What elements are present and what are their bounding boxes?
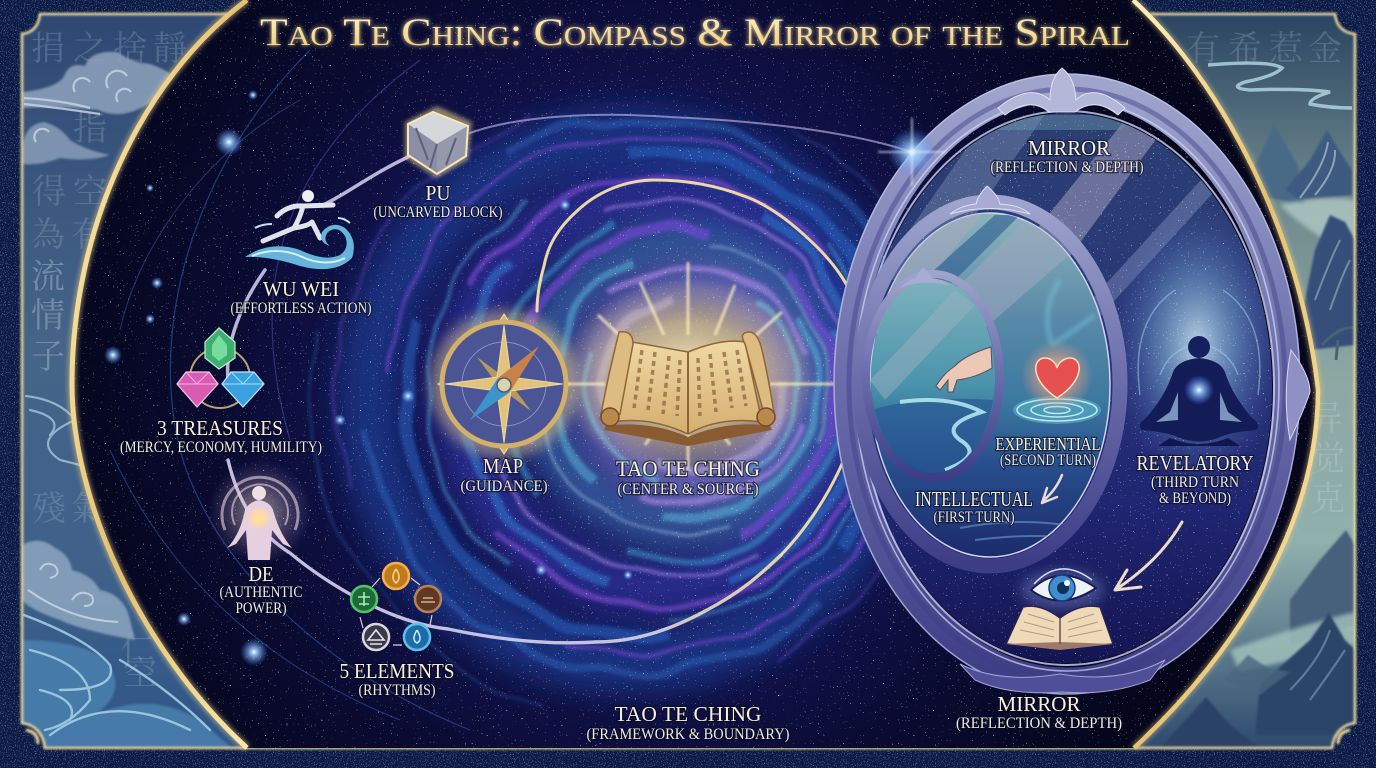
label: 3 Treasures: 3 TREASURES (157, 416, 283, 440)
label: De: (AUTHENTIC (220, 584, 302, 601)
left panel calligraphy: 流 (31, 258, 65, 296)
icon: wu wei runner on a wave (245, 190, 354, 269)
swirling water (22, 396, 232, 748)
right panel calligraphy (1186, 30, 1345, 518)
label: Tao Te Ching center: (CENTER & SOURCE) (618, 481, 758, 498)
left panel calligraphy: 仁 (121, 630, 155, 668)
label: Experiential: (SECOND TURN) (1000, 452, 1096, 469)
outer mirror side ornament (1286, 350, 1310, 440)
label: Revelatory: REVELATORY (1136, 451, 1254, 475)
lower cloud (22, 541, 135, 640)
large star flare on mirror frame (878, 118, 946, 186)
label: Tao Te Ching center: TAO TE CHING (616, 456, 760, 481)
icon: reaching hand (936, 347, 992, 392)
label: Tao Te Ching center (616, 456, 760, 498)
middle mirror interior (860, 205, 1101, 540)
label: Experiential (996, 434, 1100, 469)
label: Mirror top: MIRROR (1028, 136, 1110, 160)
label: Revelatory: & BEYOND) (1159, 490, 1231, 507)
right panel calligraphy: 克 (1311, 480, 1345, 518)
left panel calligraphy: 子 (31, 339, 65, 376)
right panel calligraphy: 有 (1186, 30, 1220, 68)
label: 5 Elements (340, 659, 454, 699)
label: Wu Wei: (EFFORTLESS ACTION) (230, 300, 372, 317)
left panel calligraphy: 空 (73, 173, 107, 211)
outer mirror interior reflections (885, 113, 1272, 662)
left panel calligraphy: 氣 (71, 490, 105, 528)
right panel calligraphy: 惹 (1269, 30, 1304, 68)
label: Intellectual (915, 487, 1033, 526)
right panel calligraphy: 异 (1309, 401, 1343, 438)
right panel calligraphy: 希 (1228, 30, 1262, 68)
icon: eye of insight (1020, 569, 1104, 610)
left panel calligraphy: 捨 (113, 30, 147, 68)
left panel calligraphy: 捐 (31, 30, 65, 68)
arrow: second turn to first (1042, 475, 1062, 503)
label: Experiential: EXPERIENTIAL (996, 434, 1100, 454)
outer mirror crest (998, 68, 1125, 115)
label: De: POWER) (236, 600, 286, 617)
left panel calligraphy: 空 (123, 655, 157, 693)
panel: middle mirror (860, 186, 1120, 566)
label: Mirror top (990, 136, 1144, 176)
label: Tao Te Ching framework: (FRAMEWORK & BOUNDARY) (586, 726, 790, 743)
left panel calligraphy: 得 (32, 174, 66, 211)
mountains (1160, 125, 1355, 748)
panel: right scroll with mountains (1130, 14, 1356, 748)
label: Mirror bottom: (REFLECTION & DEPTH) (956, 715, 1122, 732)
label: De: DE (248, 562, 274, 586)
label: Mirror bottom: MIRROR (998, 692, 1080, 716)
label: Revelatory: (THIRD TURN (1151, 474, 1239, 491)
label: Map: MAP (483, 454, 523, 478)
icon: De glowing figure (208, 460, 312, 564)
icon: five elements cycle (351, 563, 441, 650)
left panel calligraphy: 有 (71, 216, 105, 254)
bright stars (104, 90, 633, 666)
label: Mirror top: (REFLECTION & DEPTH) (990, 159, 1144, 176)
tree (1322, 328, 1355, 360)
label: Wu Wei: WU WEI (263, 277, 339, 301)
upper clouds (22, 52, 190, 164)
label: Mirror bottom (956, 692, 1122, 732)
label: Intellectual: (FIRST TURN) (934, 509, 1014, 526)
label: Pu: PU (426, 181, 450, 205)
label: Map (460, 454, 548, 495)
faint orbit lines (110, 50, 470, 730)
panel: small mirror (866, 268, 1000, 480)
panel: left scroll with clouds and water (22, 14, 262, 748)
label: Intellectual: INTELLECTUAL (915, 487, 1033, 511)
icon: compass (430, 310, 578, 458)
label: Tao Te Ching framework: TAO TE CHING (614, 702, 762, 726)
label: De (220, 562, 302, 617)
label: Tao Te Ching framework (586, 702, 790, 743)
label: Revelatory (1136, 451, 1254, 507)
left panel calligraphy: 指 (73, 110, 107, 148)
galaxy streaks (306, 114, 901, 708)
icon: open book (1006, 606, 1113, 650)
right panel calligraphy: 金 (1308, 30, 1342, 68)
icon: open Tao Te Ching scroll book (600, 332, 775, 446)
label: 5 Elements: 5 ELEMENTS (340, 659, 454, 683)
icon: glowing book rays (560, 262, 850, 478)
label: 3 Treasures (120, 416, 322, 456)
arrow: third turn to the eye (1115, 522, 1182, 590)
label: Map: (GUIDANCE) (460, 478, 548, 495)
right panel calligraphy: 觉 (1311, 440, 1345, 478)
water ribbon (1208, 63, 1352, 108)
left panel calligraphy: 靜 (153, 30, 187, 68)
icon: three treasure gems (177, 328, 264, 408)
left panel calligraphy: 情 (31, 297, 65, 335)
left panel calligraphy: 之 (73, 31, 107, 68)
small mirror crest (900, 268, 950, 288)
label: Pu: (UNCARVED BLOCK) (374, 204, 502, 221)
middle mirror crest (950, 186, 1030, 214)
small mirror interior (870, 290, 995, 480)
panel: outer mirror (834, 68, 1310, 694)
icon: glowing heart (1021, 340, 1093, 412)
label: Wu Wei (230, 277, 372, 317)
left panel calligraphy: 為 (31, 216, 65, 254)
label: 3 Treasures: (MERCY, ECONOMY, HUMILITY) (120, 439, 322, 456)
outer mirror bottom ornament (960, 660, 1165, 693)
spiral path from Pu around to the center (228, 115, 912, 643)
label: 5 Elements: (RHYTHMS) (358, 682, 436, 699)
left panel calligraphy (31, 30, 187, 693)
label: Pu (374, 181, 502, 221)
title: Tao Te Ching: Compass & Mirror of the Spiral (260, 11, 1130, 54)
icon: meditating figure (1138, 262, 1260, 446)
icon: uncarved block (405, 106, 472, 178)
left panel calligraphy: 殘 (32, 491, 66, 528)
